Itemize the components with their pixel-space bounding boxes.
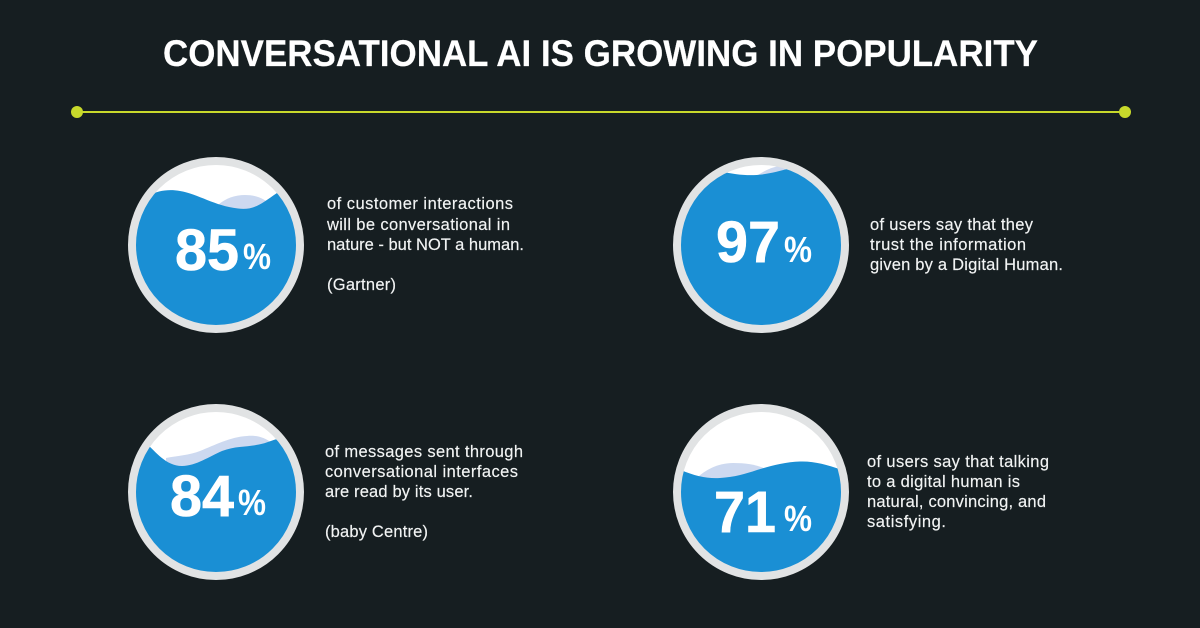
gauge: 84%: % — [238, 482, 266, 523]
text: 85 percent description: will be conversational in — [326, 216, 510, 234]
gauge: 97% — [670, 160, 850, 335]
text: 71 percent description: to a digital human is — [867, 473, 1020, 491]
gauge: 85%: % — [243, 236, 271, 277]
text: 85 percent description: nature - but NOT a human. — [327, 236, 524, 254]
gauge: 85% — [120, 161, 310, 340]
gauge: 84% — [120, 408, 310, 580]
gauge: 85%: 85 — [175, 218, 239, 283]
text: 97 percent description: trust the information — [870, 236, 1026, 254]
panel: 85 percent stat — [120, 161, 524, 340]
panel: 71 percent stat — [670, 408, 1049, 585]
text: 84 percent description: (baby Centre) — [325, 523, 428, 541]
panel: 84 percent stat — [120, 408, 523, 580]
text: 71 percent description — [867, 453, 1049, 531]
gauge: 71%: 71 — [714, 480, 776, 545]
text: 84 percent description: of messages sent through — [325, 443, 523, 461]
panel: 97 percent stat — [670, 160, 1063, 335]
text: 85 percent description — [326, 195, 524, 294]
text: 84 percent description: conversational interfaces — [325, 463, 518, 481]
text: 85 percent description: (Gartner) — [327, 276, 396, 294]
title: CONVERSATIONAL AI IS GROWING IN POPULARITY — [163, 33, 1038, 74]
text: 84 percent description — [325, 443, 523, 541]
text: 85 percent description: of customer interactions — [327, 195, 513, 213]
gauge: 84%: 84 — [170, 464, 234, 529]
gauge: 97%: % — [784, 229, 812, 270]
text: 97 percent description — [870, 216, 1063, 274]
gauge: 71%: % — [784, 498, 812, 539]
gauge: 97%: 97 — [716, 210, 780, 275]
text: 71 percent description: satisfying. — [867, 513, 946, 531]
text: 84 percent description: are read by its user. — [325, 483, 473, 501]
text: 97 percent description: of users say that they — [870, 216, 1034, 234]
divider line with end dots — [71, 106, 1131, 118]
text: 97 percent description: given by a Digital Human. — [870, 256, 1063, 274]
text: 71 percent description: of users say that talking — [867, 453, 1049, 471]
gauge: 71% — [670, 408, 845, 585]
text: 71 percent description: natural, convincing, and — [867, 493, 1046, 511]
